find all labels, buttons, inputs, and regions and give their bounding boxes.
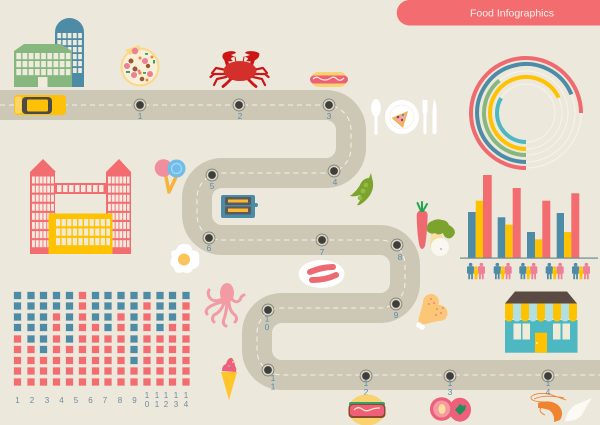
road stops with numbers: 1 [546, 378, 551, 388]
icon: broccoli and garlic [427, 219, 455, 256]
icon: tomato [430, 397, 471, 422]
road stops with numbers: 9 [394, 310, 399, 320]
road stops with numbers: 6 [207, 243, 212, 253]
icon: pea pod [350, 173, 373, 205]
icon: red and yellow building [30, 159, 131, 254]
waffle chart: 9 [132, 396, 137, 405]
waffle chart: 2 [164, 400, 169, 409]
icon: ice cream cone [221, 358, 237, 400]
waffle chart: 1 [15, 396, 20, 405]
waffle chart: 5 [74, 396, 79, 405]
road stops with numbers: 1 [364, 378, 369, 388]
icon: fried egg [170, 244, 199, 273]
waffle chart: 1 [145, 391, 150, 400]
radial chart [471, 58, 581, 168]
waffle chart: 3 [174, 400, 179, 409]
icon: sausages on plate [298, 260, 344, 288]
road stops with numbers: 7 [320, 247, 325, 257]
icon: office buildings [14, 18, 84, 87]
icon: taxi [14, 95, 66, 115]
icon: hot dog [310, 72, 348, 87]
waffle chart: 4 [59, 396, 64, 405]
icon: carrot [417, 202, 428, 249]
waffle chart: 1 [155, 400, 160, 409]
title banner [397, 0, 600, 26]
waffle chart: 1 [174, 391, 179, 400]
road stops with numbers: 4 [546, 387, 551, 397]
waffle chart: 3 [45, 396, 50, 405]
icon: burger [348, 394, 386, 425]
road stops with numbers: 4 [333, 177, 338, 187]
icon: double ice cream cone [155, 159, 186, 192]
road stops with numbers: 1 [448, 378, 453, 388]
waffle chart: 4 [184, 400, 189, 409]
waffle chart: 0 [145, 400, 150, 409]
people icons [467, 263, 590, 279]
icon: toaster [221, 195, 258, 218]
road stops with numbers: 2 [238, 111, 243, 121]
road stops with numbers: 3 [448, 387, 453, 397]
road stops with numbers: 0 [265, 322, 270, 332]
road stops with numbers: 1 [271, 382, 276, 392]
icon: octopus [206, 283, 244, 326]
waffle chart: 7 [103, 396, 108, 405]
icon: pizza [120, 45, 160, 86]
waffle chart: 2 [30, 396, 35, 405]
waffle chart: 6 [88, 396, 93, 405]
icon: chicken drumstick [416, 294, 448, 330]
road stops with numbers: 1 [138, 111, 143, 121]
road stops with numbers: 2 [364, 387, 369, 397]
road stops with numbers: 1 [271, 373, 276, 383]
waffle chart: 8 [118, 396, 123, 405]
winding road [0, 105, 600, 375]
waffle chart: 1 [184, 391, 189, 400]
bar chart [460, 175, 598, 259]
road stops with numbers: 3 [327, 111, 332, 121]
waffle chart: 1 [164, 391, 169, 400]
icon: seashell [565, 398, 592, 421]
road stops with numbers: 5 [210, 181, 215, 191]
icon: crab [210, 51, 268, 86]
road stops with numbers [134, 99, 554, 397]
icon: shop [505, 292, 578, 353]
waffle chart [14, 292, 190, 409]
icon: plate with cutlery [371, 99, 437, 135]
icon: shrimp [531, 393, 566, 422]
title banner: Food Infographics [470, 8, 554, 20]
road stops with numbers: 8 [398, 252, 403, 262]
road stops with numbers: 1 [265, 314, 270, 324]
waffle chart: 1 [155, 391, 160, 400]
